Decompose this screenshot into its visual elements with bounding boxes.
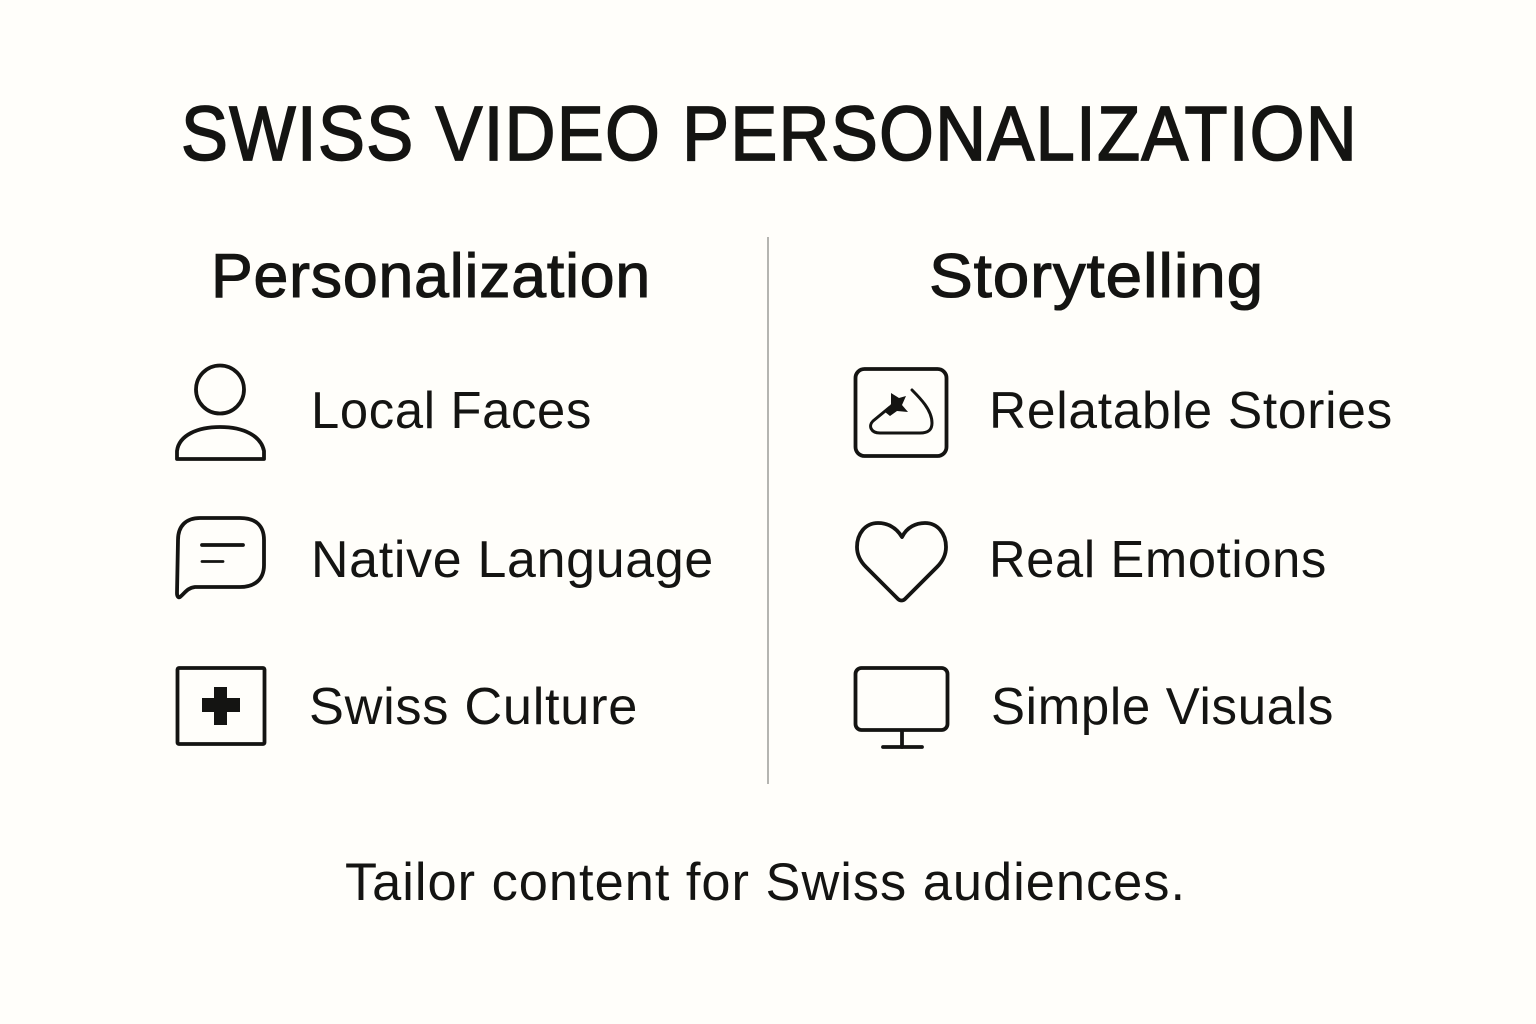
label: simple visuals: Simple Visuals [991, 678, 1334, 736]
icon: story picture [856, 369, 946, 456]
label: native language: Native Language [311, 531, 714, 589]
label: relatable stories: Relatable Stories [989, 382, 1393, 440]
icon: person [177, 366, 264, 459]
footer tagline: Tailor content for Swiss audiences. [345, 853, 1186, 912]
icon: speech bubble [177, 518, 264, 597]
label: local faces: Local Faces [311, 382, 592, 440]
panel: personalization [177, 242, 714, 744]
label: swiss culture: Swiss Culture [309, 678, 638, 736]
icon: heart [857, 523, 946, 600]
panel: storytelling [856, 242, 1393, 747]
icon: monitor [856, 668, 948, 747]
title: SWISS VIDEO PERSONALIZATION [181, 91, 1358, 177]
icon: swiss cross [178, 668, 264, 744]
heading: storytelling: Storytelling [929, 242, 1264, 311]
heading: personalization: Personalization [211, 242, 651, 311]
label: real emotions: Real Emotions [989, 531, 1327, 589]
